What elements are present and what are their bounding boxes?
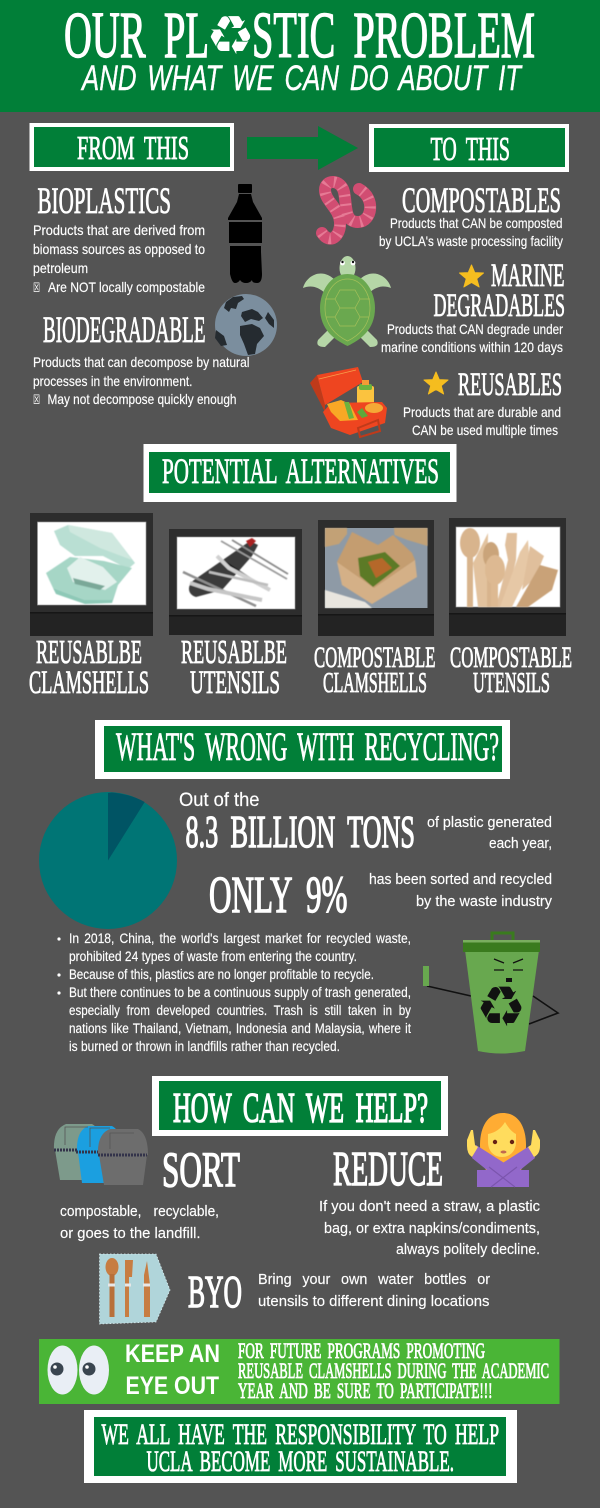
caption: reusable utensils: UTENSILS	[190, 665, 280, 701]
title: OUR PL	[64, 0, 209, 72]
panel: keep an eye out banner: KEEP AN	[125, 1340, 220, 1368]
bullet list: China recycling ban: nations like Thailand, Vietnam, Indonesia and Malaysia, where it	[69, 1021, 411, 1036]
panel: sort: SORT	[162, 1141, 240, 1197]
icon: angry recycling bin: ♻	[476, 975, 526, 1040]
closing message	[84, 1410, 517, 1483]
icon: recycling symbol: ♻	[206, 4, 255, 67]
statistic: 8.3 billion tons: Out of the	[179, 790, 260, 811]
icon: globe	[215, 294, 277, 356]
icon: angry recycling bin	[423, 933, 558, 1054]
statistic: only 9 percent: by the waste industry	[416, 893, 552, 910]
panel: compostables	[379, 180, 563, 249]
bullet list: China recycling ban: Because of this, plastics are no longer profitable to recycle.	[69, 967, 374, 982]
biodegradable description: ☒	[33, 393, 40, 408]
panel: bring your own: BYO	[188, 1266, 242, 1317]
panel: biodegradable	[33, 310, 250, 408]
panel: reduce: If you don't need a straw, a plastic	[319, 1198, 540, 1215]
pie chart: 9 percent recycled	[39, 792, 177, 929]
caption: reusable utensils: REUSABLBE	[181, 634, 287, 671]
caption: reusable utensils	[181, 634, 287, 701]
panel: marine degradables: Products that CAN degrade under	[387, 321, 563, 337]
panel: biodegradable: BIODEGRADABLE	[43, 310, 206, 351]
biodegradable description	[33, 354, 250, 408]
icon: star	[460, 265, 484, 287]
biodegradable description: May not decompose quickly enough	[48, 391, 236, 407]
title	[64, 0, 535, 72]
icon: worm	[322, 182, 370, 239]
caption: reusable clamshells: REUSABLBE	[36, 634, 142, 671]
heading: how can we help: HOW CAN WE HELP?	[173, 1086, 428, 1132]
heading: to this: TO THIS	[430, 131, 510, 168]
bullet list: China recycling ban	[57, 931, 411, 1054]
biodegradable description: processes in the environment.	[33, 373, 192, 389]
statistic: 8.3 billion tons: 8.3 BILLION TONS	[186, 806, 415, 857]
photo: reusable utensils	[169, 529, 302, 635]
caption: compostable utensils	[450, 641, 572, 699]
caption: compostable clamshells	[314, 641, 436, 699]
icon: three sorting bins	[54, 1124, 148, 1185]
caption: compostable clamshells: COMPOSTABLE	[314, 641, 436, 674]
statistic: only 9 percent	[209, 867, 552, 924]
statistic: 8.3 billion tons: each year,	[489, 835, 552, 852]
panel: bring your own	[188, 1266, 490, 1317]
panel: reduce	[319, 1141, 540, 1258]
panel: keep an eye out banner: EYE OUT	[126, 1372, 219, 1400]
panel: sort: compostable, recyclable,	[60, 1203, 219, 1220]
panel: compostables: by UCLA's waste processing facility	[379, 233, 563, 249]
panel: reduce: bag, or extra napkins/condiments,	[324, 1220, 540, 1237]
bullet list: China recycling ban: prohibited 24 types of waste from entering the country.	[69, 949, 357, 964]
bioplastics description: Are NOT locally compostable	[48, 279, 205, 295]
bullet list: China recycling ban: especially from developed countries. Trash is still taken in by	[69, 1003, 411, 1018]
bullet list: China recycling ban: But there continues to be a continuous supply of trash generated,	[69, 985, 411, 1000]
bioplastics description: ☒	[33, 281, 40, 296]
icon: utensil roll	[100, 1254, 170, 1324]
icon: plastic bottle	[228, 184, 262, 283]
heading: to this	[369, 124, 569, 172]
header banner	[0, 0, 600, 112]
bioplastics description: petroleum	[33, 260, 88, 276]
icon: sea turtle	[303, 256, 391, 347]
icon: lunchbox	[310, 367, 387, 437]
panel: bioplastics: BIOPLASTICS	[38, 181, 171, 222]
biodegradable description: Products that can decompose by natural	[33, 354, 250, 370]
statistic: 8.3 billion tons: of plastic generated	[427, 814, 552, 831]
panel: marine degradables	[381, 258, 565, 355]
arrow	[247, 126, 358, 170]
panel: reduce: REDUCE	[333, 1141, 443, 1196]
icon: star	[424, 372, 448, 394]
caption: reusable clamshells: CLAMSHELLS	[29, 665, 149, 701]
bioplastics description: Products that are derived from	[33, 222, 205, 238]
statistic: only 9 percent: has been sorted and recycled	[369, 871, 552, 888]
panel: bring your own: utensils to different dining locations	[258, 1293, 490, 1310]
panel: reusables: Products that are durable and	[403, 404, 561, 420]
bullet list: China recycling ban: In 2018, China, the world's largest market for recycled waste,	[69, 931, 411, 946]
panel: reduce: always politely decline.	[396, 1241, 540, 1258]
heading: what's wrong with recycling	[95, 720, 510, 779]
heading: how can we help	[152, 1076, 448, 1136]
icon: eyes	[48, 1346, 109, 1394]
bioplastics description	[33, 222, 205, 296]
icon: woman crossing arms	[467, 1113, 540, 1187]
photo: compostable utensils	[449, 518, 566, 636]
bioplastics description: biomass sources as opposed to	[33, 241, 205, 257]
panel: bioplastics	[33, 181, 205, 296]
bullet list: China recycling ban: is burned or thrown in landfills rather than recycled.	[69, 1039, 340, 1054]
panel: keep an eye out banner	[39, 1338, 560, 1404]
panel: sort	[60, 1141, 240, 1242]
photo: compostable clamshell	[318, 520, 434, 636]
banner message	[238, 1338, 549, 1403]
panel: reusables	[403, 367, 562, 438]
panel: bring your own: Bring your own water bottles or	[258, 1271, 490, 1288]
heading: from this: FROM THIS	[77, 130, 189, 167]
caption: reusable clamshells	[29, 634, 149, 701]
panel: reusables: CAN be used multiple times	[412, 422, 558, 438]
heading: potential alternatives	[144, 444, 456, 502]
panel: compostables: Products that CAN be composted	[390, 215, 562, 231]
heading: from this	[30, 123, 234, 171]
statistic: 8.3 billion tons	[179, 790, 552, 857]
photo: reusable clamshell	[30, 513, 153, 636]
panel: marine degradables: marine conditions within 120 days	[381, 339, 563, 355]
statistic: only 9 percent: ONLY 9%	[209, 867, 348, 924]
caption: compostable clamshells: CLAMSHELLS	[323, 667, 427, 699]
panel: sort: or goes to the landfill.	[60, 1225, 200, 1242]
